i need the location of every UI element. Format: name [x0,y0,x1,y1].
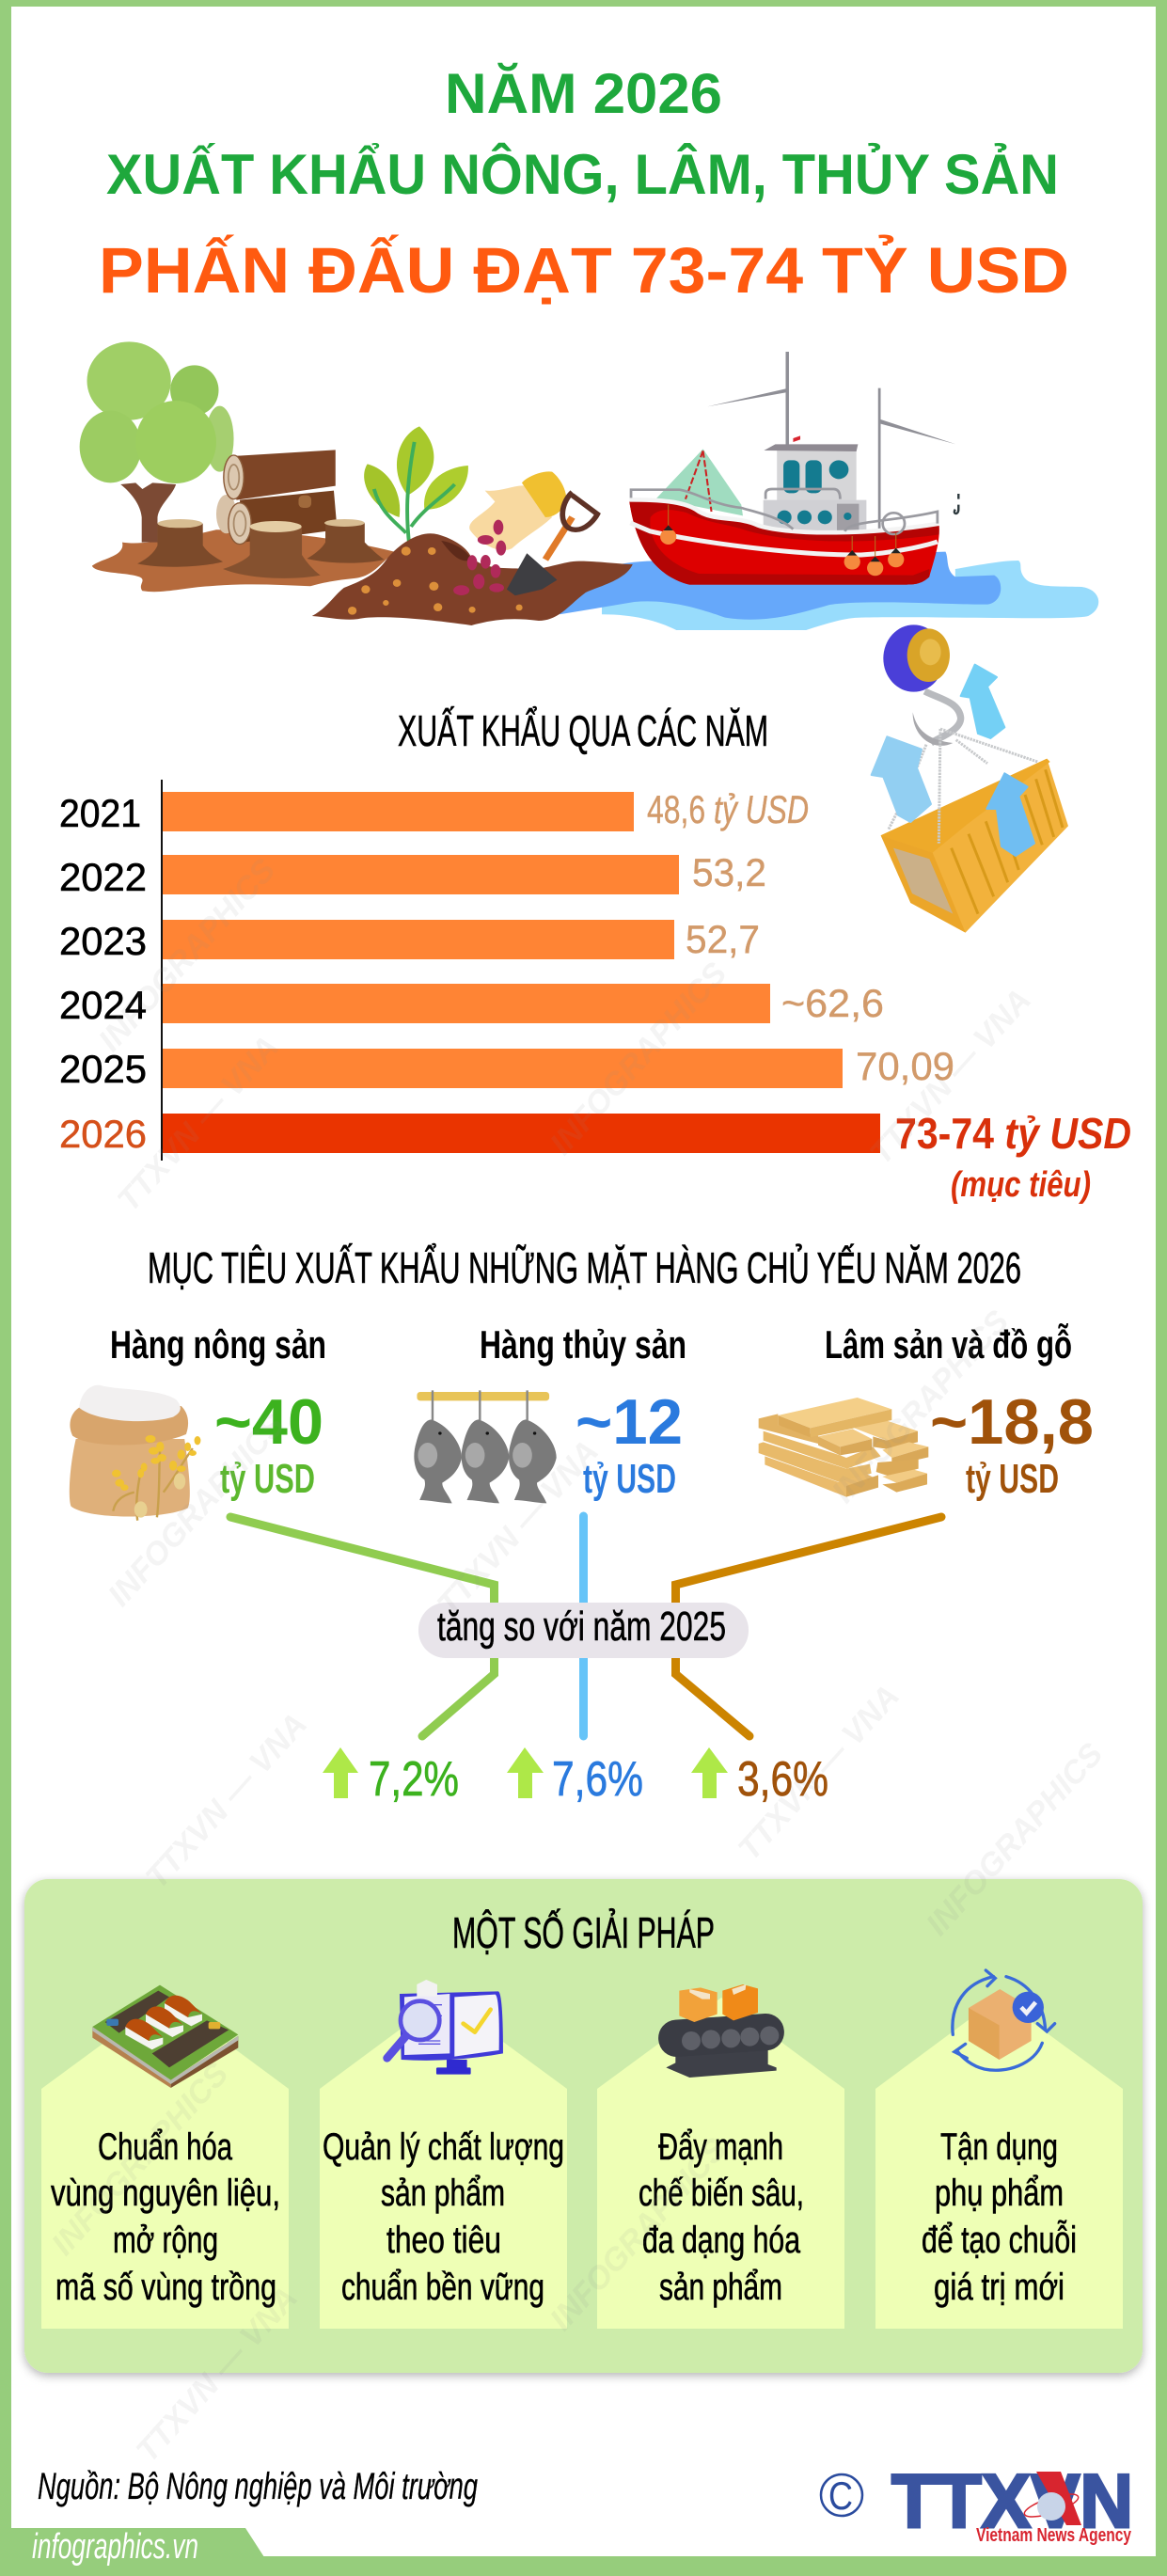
logo: TTXVN Vietnam News Agency: TTXVN [891,2459,1133,2544]
card: deep processing: chế biến sâu, [639,2173,804,2214]
title: NĂM 2026 [445,62,722,125]
bar chart: exports 2021-2026 [59,780,1131,1205]
crane pulley [883,624,950,692]
card: quality management [320,1998,567,2329]
watermark: INFOGRAPHICS [544,956,734,1162]
icon: recycling box [953,1970,1055,2070]
footer tab: infographics.vn [32,2527,198,2567]
chains [889,729,1037,844]
column: agricultural products [70,1322,326,1521]
bar 2026 target: (mục tiêu) [951,1165,1091,1205]
bar 2026 target [59,1109,1131,1205]
boat masts and booms [707,352,956,530]
card: raw material areas: mở rộng [113,2220,218,2261]
card: quality management: sản phẩm [381,2173,505,2214]
panel: solutions [24,1879,1143,2373]
column: forest and wood products: tỷ USD [966,1456,1059,1502]
connector lines [230,1516,941,1736]
back arrow [961,665,1004,738]
column: forest and wood products: Lâm sản và đồ gỗ [825,1321,1072,1367]
column: forest and wood products [759,1321,1094,1502]
growth: aquatic 7.6% [507,1747,643,1807]
ground [92,529,394,592]
bar 2021: 48,6 tỷ USD [647,787,809,831]
icon: hanging dried fish [414,1390,557,1503]
card: quality management: chuẩn bền vững [341,2267,544,2308]
icon: rice sack [70,1385,200,1521]
soil mound [312,533,633,625]
source: Nguồn: Bộ Nông nghiệp và Môi trường [38,2466,478,2507]
watermark: TTXVN — VNA [130,2280,305,2469]
bar 2023: 2023 [59,919,147,963]
panel: solutions: MỘT SỐ GIẢI PHÁP [452,1908,715,1957]
icon: conveyor with boxes [657,1984,785,2078]
card: quality management: theo tiêu [386,2220,501,2261]
watermark: TTXVN — VNA [863,982,1038,1171]
callout: increase compared with 2025 [418,1603,749,1658]
growth: agricultural 7.2%: 7,2% [369,1752,459,1807]
bar 2026 target: 2026 [59,1112,147,1156]
bar 2025 [59,1044,954,1091]
title: PHẤN ĐẤU ĐẠT 73-74 TỶ USD [99,234,1069,307]
small hook [954,494,958,514]
watermark: INFOGRAPHICS [92,852,283,1058]
card: deep processing: đa dạng hóa [642,2220,801,2261]
bar 2024: ~62,6 [781,981,884,1025]
title: XUẤT KHẨU NÔNG, LÂM, THỦY SẢN [106,143,1059,206]
water [560,552,1098,630]
left arrow [872,736,931,822]
card: raw material areas: vùng nguyên liệu, [51,2173,280,2214]
card: by-products: Tận dụng [940,2126,1058,2168]
card: deep processing: sản phẩm [659,2267,782,2308]
watermark: INFOGRAPHICS [826,1304,1017,1509]
watermark: TTXVN — VNA [431,1433,606,1622]
bar 2025: 70,09 [856,1044,954,1088]
logs [216,450,338,545]
card: raw material areas [41,1998,289,2329]
growth: aquatic 7.6%: 7,6% [552,1752,643,1807]
watermark: TTXVN — VNA [732,1678,907,1867]
watermark: TTXVN — VNA [139,1706,314,1895]
copyright mark: C [828,2473,853,2518]
gloved hand and beans [453,471,566,595]
card: quality management: Quản lý chất lượng [323,2126,564,2168]
column: agricultural products: Hàng nông sản [110,1322,326,1367]
column: aquatic products: tỷ USD [583,1456,676,1502]
shovel [507,492,597,595]
card: deep processing [597,1998,844,2329]
bar 2021: 2021 [59,791,141,835]
column: forest and wood products: ~18,8 [930,1386,1094,1458]
card: by-products: giá trị mới [934,2267,1064,2308]
copyright mark [821,2473,862,2518]
icon: farm plot [92,1985,238,2088]
card: by-products: để tạo chuỗi [922,2219,1077,2261]
icon: monitor with magnifier [387,1980,503,2075]
column: agricultural products: tỷ USD [220,1456,315,1502]
hook [913,691,961,746]
column: aquatic products: Hàng thủy sản [480,1322,686,1367]
icon: crane hook lifting container [872,624,1068,933]
shipping container [881,759,1068,933]
watermark: INFOGRAPHICS [920,1736,1111,1942]
boat cabin [764,444,866,533]
illustration: forest and seedling [80,341,633,625]
bar 2023: 52,7 [686,917,760,961]
icon: stacked wood planks [759,1398,928,1497]
globe and orbit [1022,2489,1080,2521]
bar 2024 [59,981,884,1027]
bar 2022: 2022 [59,855,147,899]
boat buoys [660,505,904,576]
watermark [45,852,1111,2469]
bar 2021 [59,787,809,835]
bar 2022 [59,850,766,899]
card: raw material areas: Chuẩn hóa [98,2126,233,2168]
bar 2022: 53,2 [692,850,766,894]
card: deep processing: Đẩy mạnh [658,2126,783,2168]
title [99,62,1069,307]
watermark: TTXVN — VNA [111,1029,286,1218]
tree stumps [137,519,385,578]
watermark: INFOGRAPHICS [102,1407,292,1613]
growth: agricultural 7.2% [323,1747,459,1807]
column: aquatic products: ~12 [576,1386,683,1458]
column: agricultural products: ~40 [214,1386,323,1458]
callout: increase compared with 2025: tăng so với năm 2025 [437,1604,726,1650]
bar 2025: 2025 [59,1047,147,1091]
bar 2023 [59,917,760,963]
seedling [364,426,468,545]
heading: exports by year: XUẤT KHẨU QUA CÁC NĂM [398,706,768,755]
growth: wood 3.6%: 3,6% [737,1752,828,1807]
boat net [656,449,743,515]
watermark: INFOGRAPHICS [544,2131,734,2337]
bar 2024: 2024 [59,983,147,1027]
column: aquatic products [414,1322,686,1503]
tree [80,341,234,543]
bar 2026 target: 73-74 tỷ USD [895,1109,1131,1158]
illustration: water and fishing boat [560,352,1098,630]
card: by-products: phụ phẩm [935,2173,1064,2214]
boat hull [629,490,939,585]
watermark: INFOGRAPHICS [45,2056,236,2262]
card: raw material areas: mã số vùng trồng [55,2267,276,2308]
growth: wood 3.6% [691,1747,828,1807]
card: by-products [875,1998,1123,2329]
front arrow [986,773,1034,856]
